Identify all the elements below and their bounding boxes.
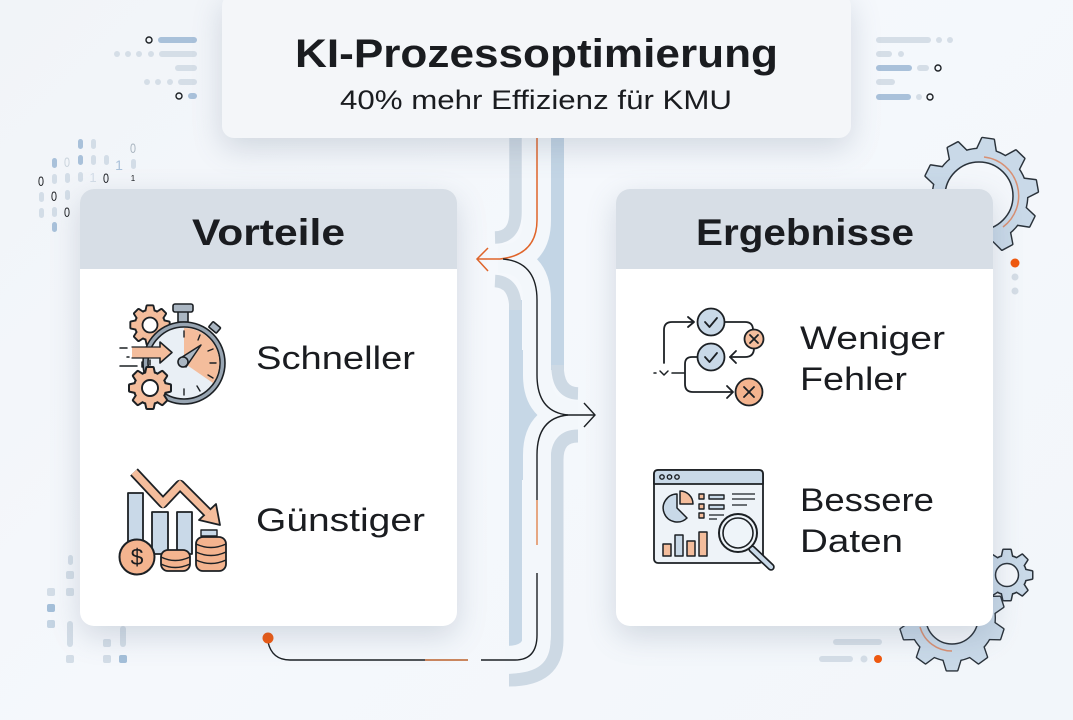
central connector pipes: [495, 138, 578, 680]
decoration: top-left binary matrix: 0: [51, 188, 57, 204]
label: Bessere Daten: [800, 482, 934, 559]
decoration: top-left binary matrix: 0: [64, 204, 70, 220]
subtitle: 40% mehr Effizienz für KMU: [340, 85, 732, 115]
gear: bottom right large: [900, 566, 1004, 670]
heading: Ergebnisse: Ergebnisse: [696, 212, 914, 253]
gear: top right: [915, 131, 1045, 261]
decoration: top-left data lines: [114, 37, 197, 99]
icon: stopwatch with gears: [120, 304, 225, 408]
decoration: top-left binary matrix: 0: [103, 170, 109, 186]
decoration: top-left binary matrix: 0: [64, 154, 70, 170]
label: Weniger Fehler: [800, 320, 945, 397]
label: Schneller: Schneller: [256, 340, 415, 376]
label: Weniger Fehler: Weniger: [800, 320, 945, 356]
decoration: bottom-right data lines: [819, 639, 882, 663]
heading: Vorteile: Vorteile: [192, 212, 345, 253]
arrow: orange to Vorteile: [477, 138, 537, 271]
label: Weniger Fehler: Fehler: [800, 361, 907, 397]
decoration: top-left binary matrix: 0: [38, 173, 44, 189]
decoration: bottom-left data squares: [47, 555, 127, 663]
icon: falling costs chart with coins: [120, 472, 226, 574]
accents on connector line: [425, 500, 537, 660]
start dot: [262, 632, 274, 644]
label: Günstiger: Günstiger: [256, 502, 425, 538]
icon: dashboard with magnifier: [654, 470, 771, 567]
decoration: top-right data lines: [876, 37, 953, 100]
decoration: top-left binary matrix: 1: [131, 174, 136, 183]
label: Bessere Daten: Daten: [800, 523, 903, 559]
title card background: [222, 0, 851, 138]
dots: beside top gear: [1010, 258, 1020, 294]
panel: Vorteile: [80, 189, 457, 626]
label: Bessere Daten: Bessere: [800, 482, 934, 518]
icon: workflow with checks and errors: [654, 308, 764, 406]
decoration: top-left binary matrix: [38, 139, 136, 232]
decoration: top-left binary matrix: 1: [115, 157, 123, 173]
panel: Ergebnisse: [616, 189, 993, 626]
title: KI-Prozessoptimierung: [295, 32, 778, 76]
icon: falling costs chart with coins: $: [131, 544, 144, 570]
arrow: black to Ergebnisse: [268, 259, 595, 660]
gear: bottom right small: [982, 550, 1032, 600]
decoration: top-left binary matrix: 1: [89, 170, 97, 185]
decoration: top-left binary matrix: 0: [130, 140, 136, 156]
